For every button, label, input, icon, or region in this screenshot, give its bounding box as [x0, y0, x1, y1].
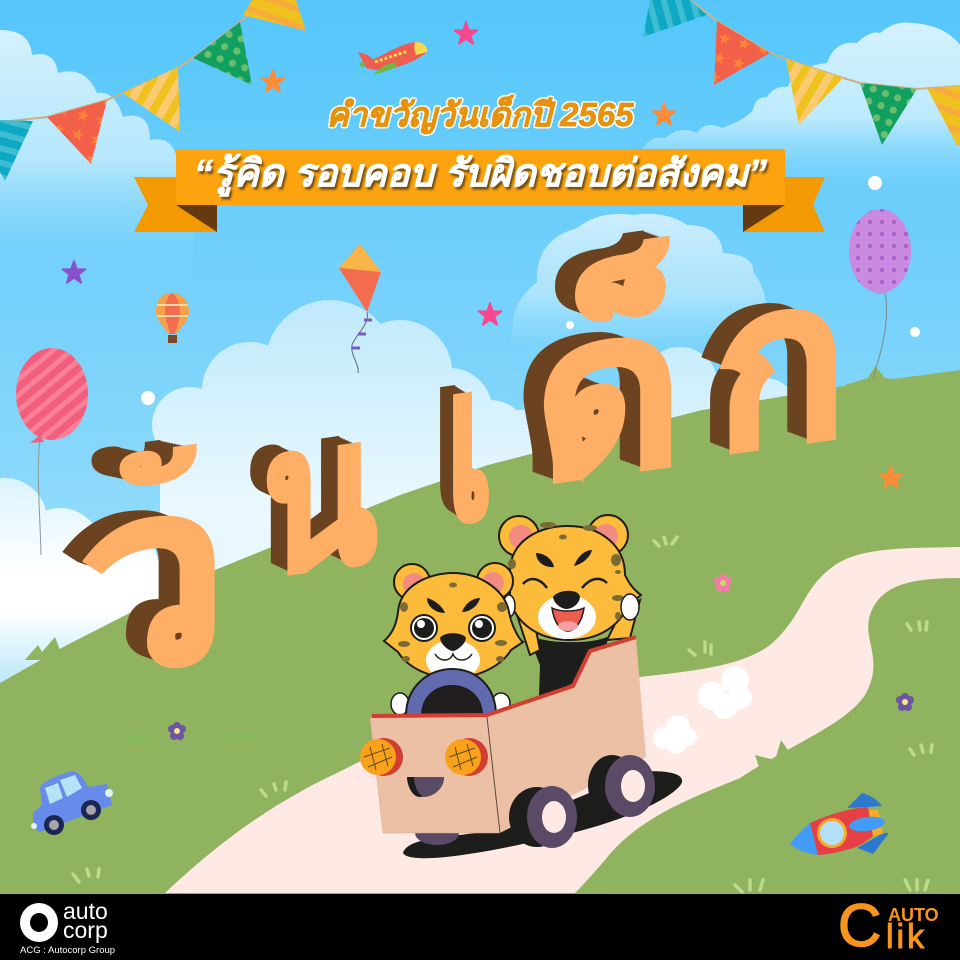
logo ring: [20, 903, 58, 942]
cloud: behind upper mark: [510, 214, 770, 350]
footer bar: [0, 894, 960, 960]
ribbon text: “รู้คิด รอบคอบ รับผิดชอบต่อสังคม”: [194, 153, 767, 195]
headlight right: [445, 738, 488, 776]
brows: [536, 550, 592, 567]
nose: [441, 634, 465, 650]
car front: [370, 717, 500, 833]
car side: [487, 638, 646, 833]
heading: slogan year: คำขวัญวันเด็กปี 2565: [326, 96, 634, 133]
logo AUTO: AUTO: [888, 905, 939, 925]
ears: [499, 516, 539, 556]
eyes: [411, 615, 437, 641]
stars: [63, 22, 902, 488]
brows: [427, 598, 480, 613]
logo: autoclik: [838, 892, 939, 959]
cloud: top right: [640, 22, 960, 230]
head: [510, 526, 641, 640]
hill: [0, 370, 960, 900]
car edge: [487, 717, 500, 833]
mouth: [552, 608, 584, 631]
grass marks: [73, 537, 932, 892]
headlight left: [360, 738, 403, 776]
muzzle: [426, 640, 480, 680]
steering wheel: [406, 669, 496, 716]
logo: autocorp: [20, 898, 115, 956]
logo wordmark: corp: [63, 917, 108, 943]
letter sara e: เ: [446, 322, 493, 565]
cloud: centre: [152, 300, 797, 590]
car mouth: [407, 777, 444, 797]
grass tufts: [25, 366, 900, 660]
white dots: [141, 176, 920, 405]
spots: [398, 582, 507, 662]
cheetah front: [384, 563, 523, 716]
letter ko kai: ก: [716, 232, 846, 498]
logo Clik: lik: [886, 918, 927, 956]
smoke puffs: [653, 666, 752, 754]
logo caption: ACG : Autocorp Group: [20, 945, 115, 956]
icon: kite: [339, 244, 381, 373]
cheetah rear: [499, 515, 641, 697]
icon: purple balloon: [849, 209, 911, 378]
cloud: lower left: [0, 478, 180, 690]
cloud: top left: [0, 30, 193, 300]
ears: [394, 564, 430, 600]
hands: [391, 693, 409, 715]
letter no nu: น: [263, 377, 376, 616]
car trim: [372, 637, 636, 716]
nose: [554, 592, 579, 608]
icon: rocket: [790, 793, 889, 855]
logo wordmark: auto: [63, 898, 108, 924]
faint grass patches: [124, 733, 256, 744]
icon: red balloon: [16, 348, 88, 555]
shirt: [530, 637, 607, 697]
logo wordmark: [63, 898, 108, 943]
title: big 3D word: [62, 230, 846, 727]
icon: airplane: [358, 42, 427, 75]
head: [384, 573, 523, 678]
icon: hot air balloon: [156, 293, 189, 343]
icon: flowers: [168, 574, 914, 740]
spots: [508, 522, 624, 620]
letter do dek: ด: [535, 259, 682, 528]
smile: [435, 654, 472, 660]
mark mai han akat: [190, 444, 192, 569]
happy eyes: [523, 579, 607, 588]
car shadow: [403, 771, 682, 858]
bunting right: [643, 0, 960, 145]
muzzle: [538, 595, 596, 639]
letter wo waen: ว: [80, 427, 227, 727]
icon: small blue car: [31, 771, 113, 835]
mark mai tai khu: [689, 256, 691, 471]
car front wheel: [509, 786, 577, 848]
car rear wheel: [588, 755, 655, 817]
logo C: C: [838, 892, 881, 959]
hidden wheel: [415, 821, 459, 845]
bunting left: [0, 0, 306, 181]
raised hands: [503, 595, 515, 617]
grass tuft on road edge: [755, 740, 805, 770]
arms: [516, 612, 540, 655]
road: [165, 547, 960, 893]
